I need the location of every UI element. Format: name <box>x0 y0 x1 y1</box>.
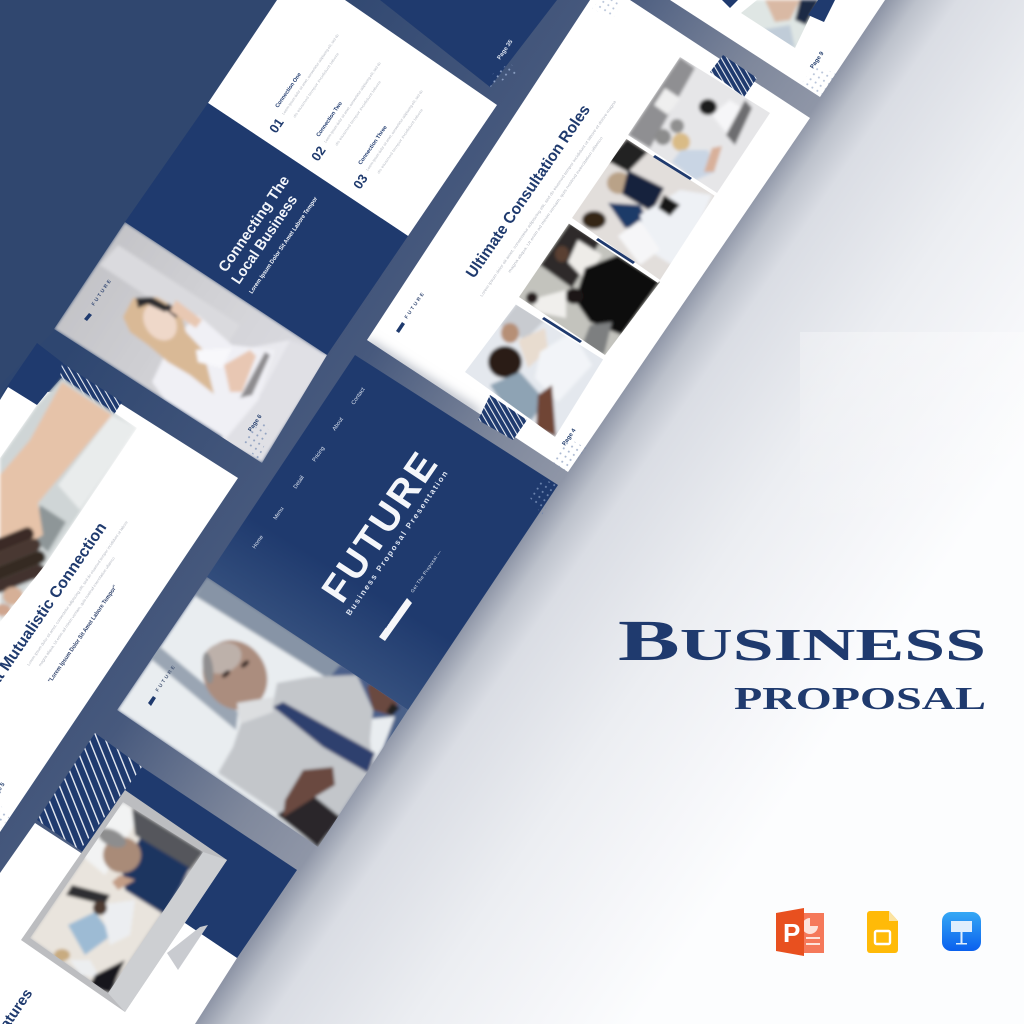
heading: connecting the local business: Lorem Ipsum Dolor Sit Amet Labore Tempor <box>249 196 320 295</box>
blue corner <box>722 0 738 8</box>
heading: business: B USINESS <box>618 608 986 673</box>
icon: powerpoint <box>776 908 824 956</box>
list item 01: Connection One <box>275 72 303 109</box>
tablet <box>21 790 227 1012</box>
blue corner <box>0 343 63 405</box>
photo: woman on phone with laptop <box>54 222 330 463</box>
heading: connecting the local business: Connecting The <box>215 173 293 275</box>
photo: man in shirt and tie <box>117 577 412 847</box>
edge shadow <box>362 340 480 420</box>
white block <box>0 823 237 1024</box>
body text: magna aliqua. Ut enim ad minim veniam, quis nostrud exercitation ullamco <box>507 135 604 274</box>
subtitle: Business Proposal Presentation <box>344 469 450 617</box>
heading: proposal: PROPOSAL <box>734 680 986 716</box>
photo: handshake <box>0 377 137 622</box>
button: learn more <box>379 598 412 641</box>
list item 02: Lorem ipsum dolor sit amet, consectetur adipiscing elit, sed do <box>324 61 382 144</box>
blue block <box>80 767 297 958</box>
photo strip 4 <box>465 304 603 437</box>
navigation menu: Contact <box>351 387 367 406</box>
quote: "Lorem Ipsum Dolor Sit Amet Labore Tempor" <box>48 584 119 684</box>
navigation menu: Pricing <box>312 446 326 463</box>
white list panel <box>208 0 497 236</box>
stripes: bottom <box>478 395 527 440</box>
stripes: top <box>710 55 757 97</box>
heading: connecting the local business <box>215 173 320 295</box>
page label: Page 6 <box>248 413 264 433</box>
navigation menu <box>252 387 367 550</box>
dot pattern <box>528 478 558 515</box>
navigation menu: Home <box>252 534 265 550</box>
page label: Page 4 <box>562 427 578 447</box>
list item 03: Connection Three <box>358 125 389 166</box>
dot pattern <box>490 63 519 87</box>
list item 03: Lorem ipsum dolor sit amet, consectetur adipiscing elit, sed do <box>366 89 424 172</box>
list item 02: do eiusmod tempor incididunt labore <box>335 80 382 147</box>
navigation menu: Detail <box>293 475 306 490</box>
list item 01: Lorem ipsum dolor sit amet, consectetur adipiscing elit, sed do <box>282 33 340 116</box>
logo: future: FUTURE <box>91 277 114 307</box>
navigation menu: Menu <box>273 506 286 521</box>
page label: Page 35 <box>497 39 515 61</box>
list item 03: do eiusmod tempor incididunt labore <box>377 108 424 175</box>
dot pattern top <box>592 0 624 20</box>
navigation menu: About <box>332 416 345 432</box>
list item 01 <box>266 33 340 136</box>
soft white patch <box>800 332 1024 542</box>
panel: slide connecting the local business <box>54 0 497 463</box>
heading: ultimate consultation roles: Ultimate Consultation Roles <box>463 102 594 281</box>
stripes <box>60 363 122 416</box>
list item 01: 01 <box>266 115 287 136</box>
dot pattern <box>243 420 270 461</box>
title: business proposal <box>618 608 986 716</box>
panel: slide features with tablet <box>0 733 297 1024</box>
list item 02 <box>308 61 382 164</box>
page label: Page 9 <box>810 50 826 70</box>
stripes dark corner <box>808 0 835 22</box>
body text: Lorem ipsum dolor sit amet, consectetur adipiscing elit, sed do eiusmod tempor incididunt ut labore <box>26 519 129 667</box>
photo strip 1 <box>628 57 770 193</box>
body text: Lorem ipsum dolor sit amet, consectetur adipiscing elit, sed do eiusmod tempor incididunt ut labore et dolore magna <box>479 99 617 298</box>
blue band <box>125 103 408 355</box>
logo: future on man photo: FUTURE <box>155 663 178 693</box>
icon: google slides <box>867 911 898 953</box>
list item 03: 03 <box>350 171 371 192</box>
dot pattern <box>552 438 586 472</box>
photo strip 3 <box>519 224 660 355</box>
panel: slide ultimate consultation roles <box>362 0 810 472</box>
tablet stand <box>167 925 208 970</box>
logo: future <box>84 277 114 321</box>
link: get the proposal: Get The Proposal — <box>410 549 442 594</box>
list item 01: do eiusmod tempor incididunt labore <box>293 52 340 119</box>
panel: slide mutualistic connection <box>0 343 238 832</box>
list item 02: 02 <box>308 143 329 164</box>
list item 02: Connection Two <box>316 101 344 138</box>
icon: powerpoint: P <box>783 918 800 948</box>
icon: keynote <box>942 912 981 951</box>
heading: connecting the local business: Local Business <box>228 192 301 287</box>
photo dividers <box>515 136 717 360</box>
stripes <box>37 733 142 850</box>
body text: magna aliqua. Ut enim ad minim veniam, quis nostrud exercitation ullamco <box>37 555 116 667</box>
list item 03 <box>350 89 424 192</box>
logo: future <box>396 290 427 333</box>
panel: slide page 35 <box>380 0 557 87</box>
logo: future on man photo <box>148 663 178 706</box>
panel: top left blue slide <box>0 0 277 385</box>
page label and dots <box>0 781 10 830</box>
title: FUTURE: FUTURE <box>314 445 446 610</box>
photo strip 2 <box>572 139 714 280</box>
photo: hands on documents <box>741 0 818 48</box>
button: learn more: Learn More <box>384 610 398 629</box>
panel: slide future cover <box>207 355 558 710</box>
logo: future: FUTURE <box>404 290 427 320</box>
panel: slide page 9 <box>670 0 885 97</box>
tablet screen photo <box>30 802 203 993</box>
dot pattern <box>800 64 836 97</box>
